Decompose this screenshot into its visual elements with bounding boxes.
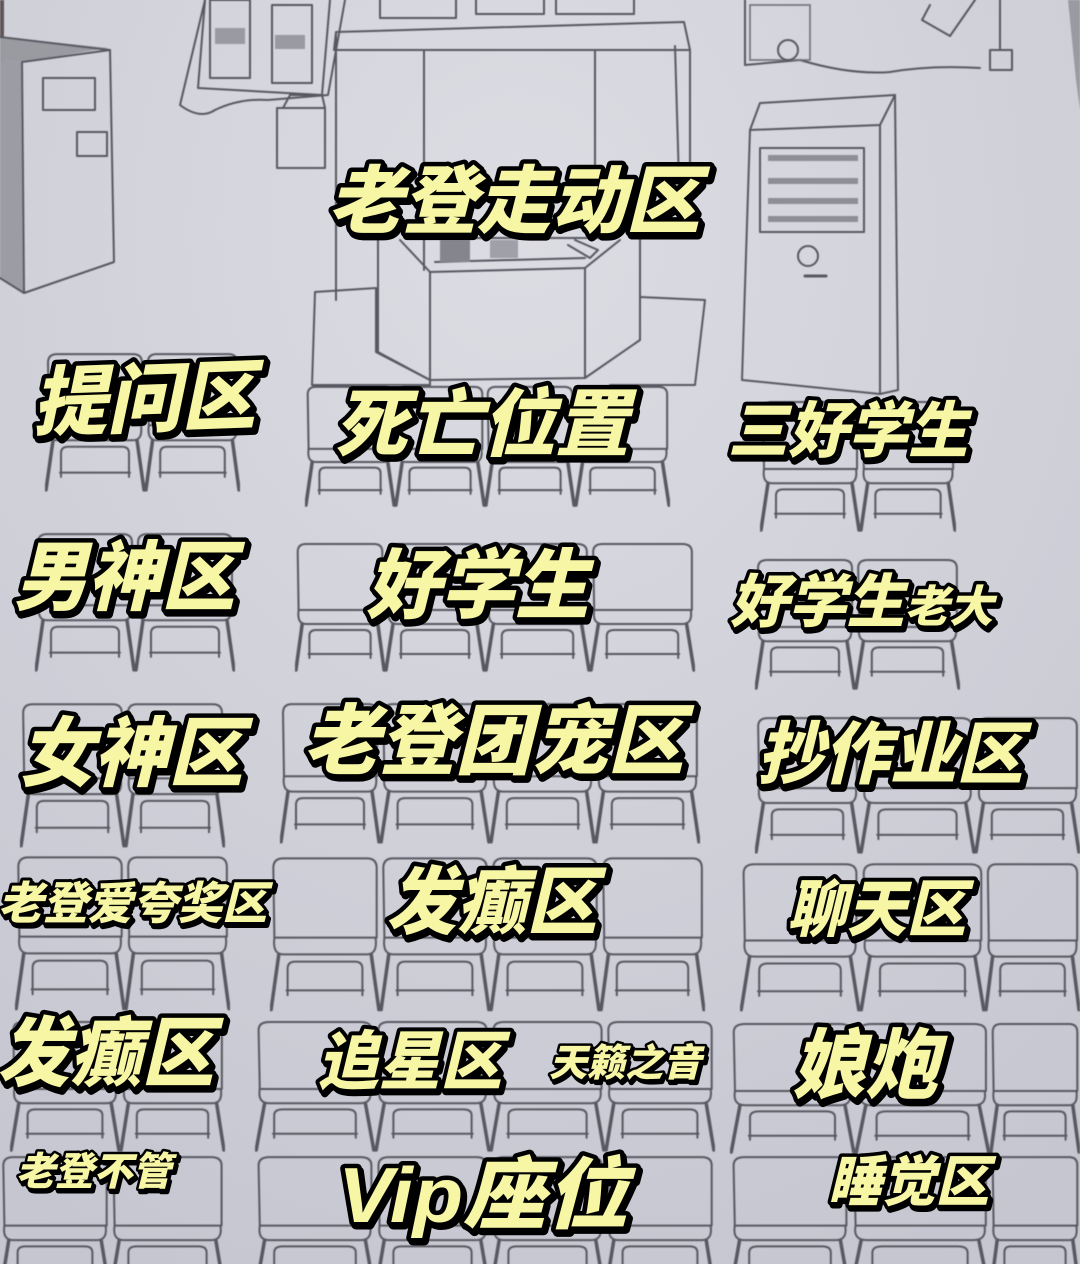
row 2	[36, 534, 134, 670]
label: teacher ignores: 老登不管	[16, 1151, 178, 1194]
label: heavenly voices: 天籁之音	[549, 1042, 705, 1085]
label: crazy zone left: 发癫区	[0, 1012, 224, 1097]
blackboard cabinet	[334, 0, 690, 300]
label: good students: 好学生	[366, 544, 595, 629]
label: good student boss: 好学生老大	[730, 570, 998, 635]
label: chat zone: 聊天区	[787, 876, 975, 945]
label: teacher praise zone: 老登爱夸奖区	[0, 878, 274, 929]
right wall panel	[745, 0, 1012, 72]
label: idol fans zone: 追星区	[317, 1026, 511, 1098]
label: handsome boys zone: 男神区	[14, 536, 246, 621]
label: VIP seats: Vip座位	[338, 1151, 636, 1239]
label: model students: 三好学生	[728, 397, 973, 465]
row 3	[21, 704, 124, 846]
row 5	[11, 1022, 119, 1150]
left cabinet	[0, 37, 114, 293]
row 6	[1, 1157, 109, 1264]
label: teacher's pets: 老登团宠区	[303, 699, 695, 785]
small box	[277, 95, 325, 168]
label: teacher walking zone: 老登走动区	[328, 160, 711, 243]
wall notice board	[180, 0, 345, 114]
desk rows	[1, 354, 1079, 1264]
label: sleeping zone: 睡觉区	[828, 1151, 997, 1213]
label: homework copying zone: 抄作业区	[757, 717, 1033, 793]
label: goddess zone: 女神区	[19, 712, 254, 797]
lectern	[378, 235, 640, 380]
label: crazy zone center: 发癫区	[386, 861, 607, 944]
right tall cabinet	[742, 95, 898, 394]
front small tables	[312, 288, 705, 385]
label: sissy: 娘炮	[792, 1024, 949, 1109]
row 4	[16, 857, 124, 1009]
photo edges	[0, 0, 1080, 110]
label: death seats: 死亡位置	[334, 383, 638, 466]
label: question zone: 提问区	[31, 354, 267, 447]
row 1	[46, 354, 144, 490]
